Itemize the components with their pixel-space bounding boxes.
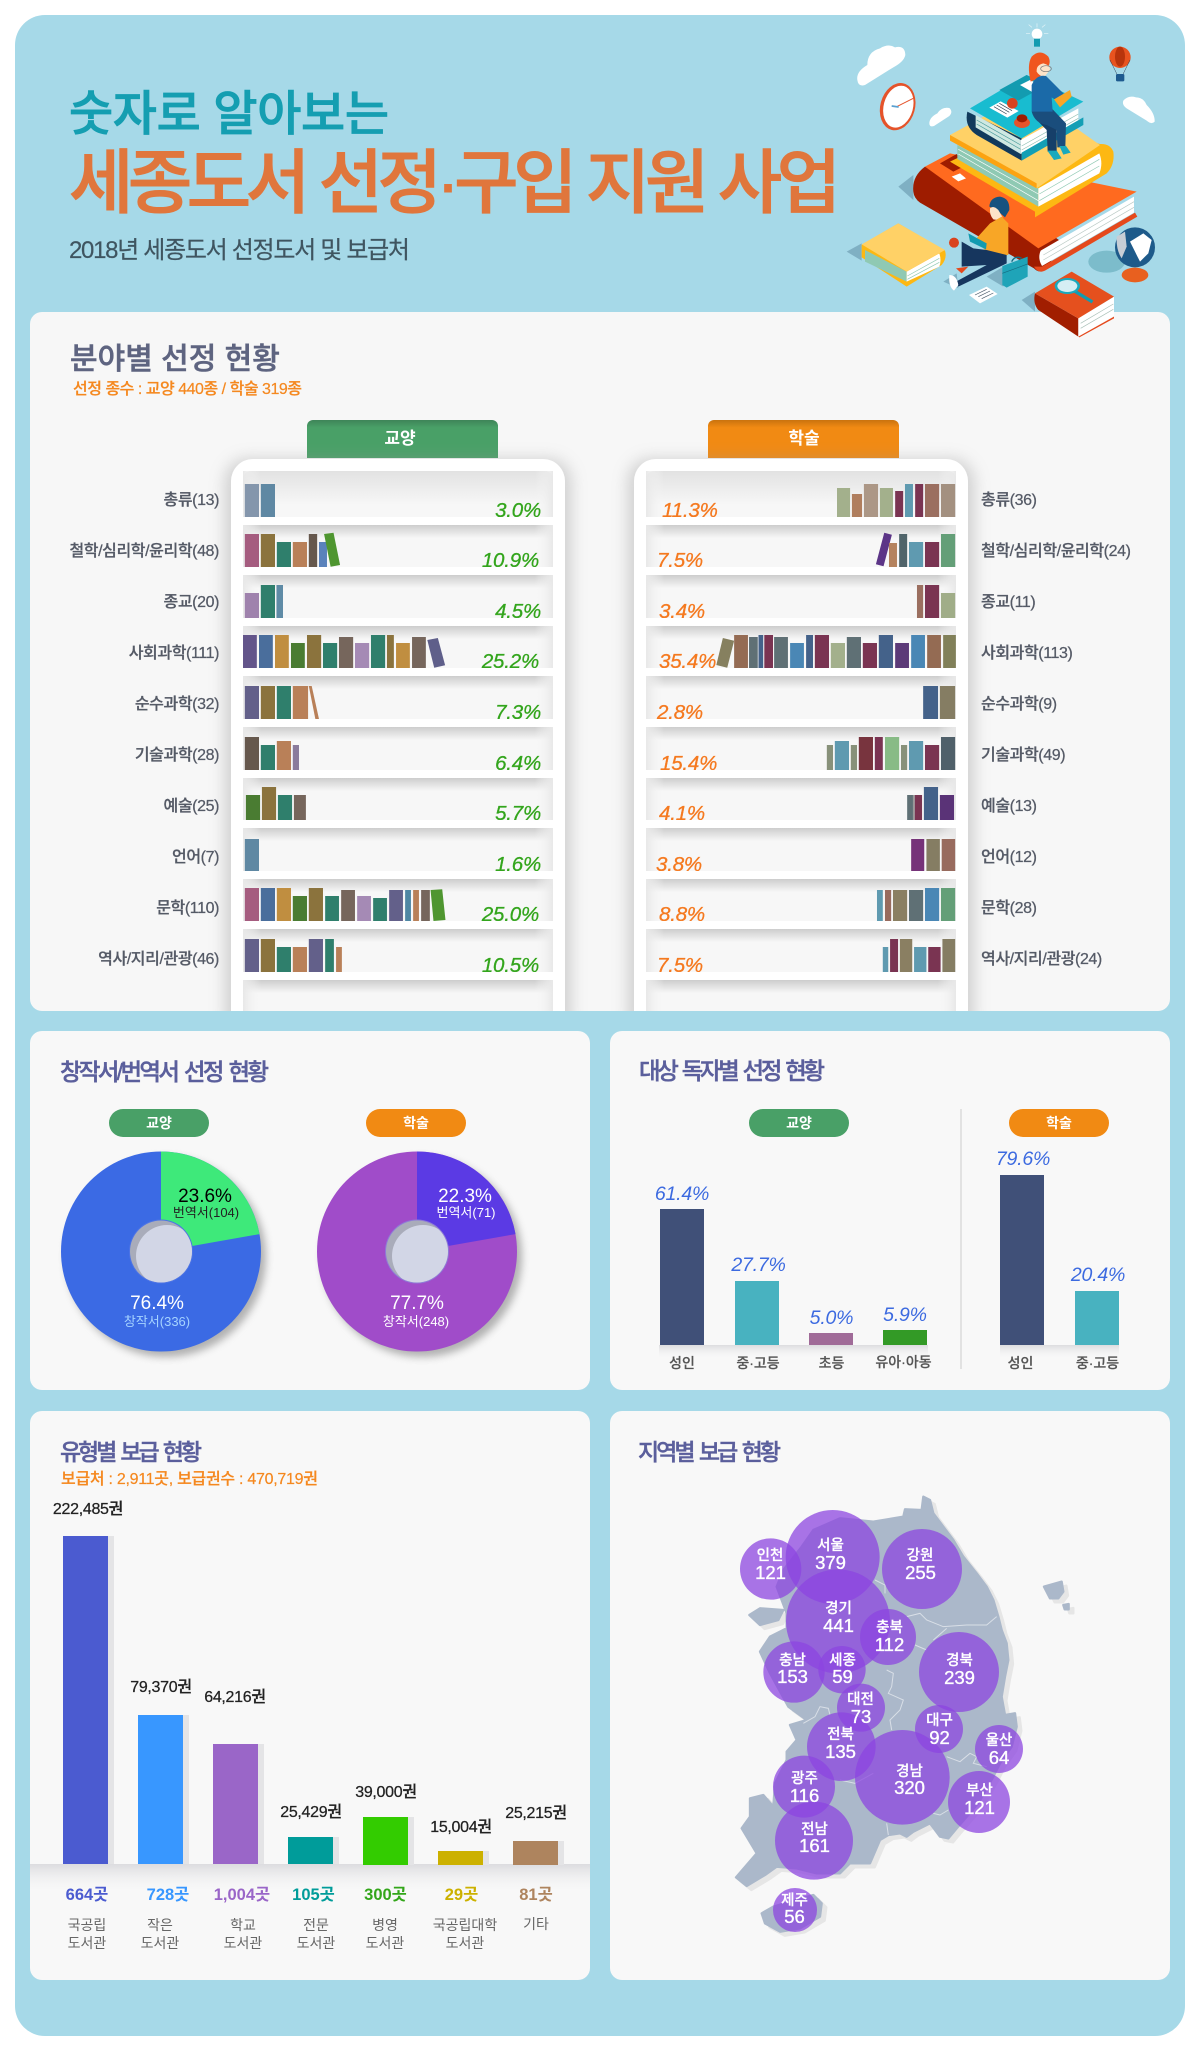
panel: field selection [30, 312, 1170, 1039]
category labels left: 총류(13) [164, 491, 219, 509]
category labels left: 철학/심리학/윤리학(48) [69, 542, 219, 560]
category labels right: 종교(11) [981, 594, 1035, 611]
region labels: 경기 [825, 1600, 852, 1617]
percentages: 교양: 25.2% [481, 650, 539, 673]
panel: distribution by region [610, 1411, 1170, 1980]
pie chart: 학술: 77.7% [390, 1293, 444, 1314]
location counts: 1,004곳 [214, 1886, 270, 1904]
category labels right: 기술과학(49) [981, 746, 1065, 764]
percentages: 교양: 10.9% [482, 549, 539, 572]
shelves: 교양 [243, 517, 553, 980]
percentages: 학술: 35.4% [659, 650, 716, 673]
category labels right: 예술(13) [981, 797, 1037, 815]
title line 2: 세종도서 선정·구입 지원 사업 [69, 144, 841, 222]
category labels right: 문학(28) [981, 899, 1037, 917]
bar chart: 학술: 중·고등 [1076, 1355, 1119, 1371]
bookshelf: 학술 [628, 459, 974, 1039]
bar values: 15,004권 [430, 1818, 492, 1836]
percentages: 교양: 7.3% [495, 701, 541, 724]
bar chart: 교양: 초등 [819, 1355, 844, 1371]
region labels: 239 [944, 1667, 975, 1688]
library type names: 병영 [372, 1917, 398, 1933]
region labels: 112 [875, 1634, 904, 1655]
bar values: 79,370권 [130, 1678, 192, 1696]
percentages: 교양: 1.6% [495, 853, 541, 876]
pie chart: 학술: 번역서(71) [436, 1205, 496, 1220]
pie chart: 학술 [317, 1152, 522, 1357]
library type names: 도서관 [68, 1935, 106, 1951]
category labels right: 사회과학(113) [981, 644, 1073, 662]
region labels: 121 [964, 1797, 995, 1818]
pill: 교양: 교양 [786, 1115, 812, 1131]
region labels: 320 [894, 1777, 925, 1798]
bar chart: 학술: 성인 [1008, 1355, 1033, 1371]
book: large yellow [950, 93, 1114, 217]
icon: paper [969, 287, 998, 303]
percentages: 교양 [481, 499, 541, 977]
bar chart: 교양: 성인 [669, 1355, 695, 1371]
library type names: 도서관 [297, 1935, 335, 1951]
region labels [755, 1537, 1012, 1927]
region labels: 부산 [966, 1782, 993, 1799]
heading: 창작서/번역서 선정 현황 [60, 1059, 269, 1085]
sub heading: 보급처 : 2,911곳, 보급권수 : 470,719권 [61, 1470, 318, 1488]
location counts [66, 1886, 553, 1904]
bar chart: library types [63, 1536, 564, 1865]
category labels left: 예술(25) [164, 797, 219, 815]
title block [69, 88, 841, 264]
category labels right [981, 491, 1131, 968]
shelves: 학술 [646, 517, 956, 980]
region labels: 92 [929, 1727, 950, 1748]
region labels: 379 [815, 1552, 846, 1573]
library type names: 전문 [303, 1917, 329, 1933]
percentages: 학술: 2.8% [656, 701, 703, 724]
bar chart: 학술: 79.6% [996, 1148, 1050, 1170]
location counts: 81곳 [519, 1886, 553, 1904]
pie chart: 교양: 번역서(104) [173, 1205, 239, 1220]
library type names [68, 1916, 549, 1951]
category labels right: 언어(12) [981, 848, 1037, 866]
percentages: 학술: 7.5% [657, 954, 703, 977]
bar values: 39,000권 [355, 1783, 417, 1801]
percentages: 교양: 3.0% [495, 499, 541, 522]
heading: 지역별 보급 현황 [638, 1439, 781, 1465]
region labels: 전남 [801, 1821, 828, 1838]
icon: hot-air balloon [1109, 47, 1131, 81]
bar chart: 교양: 중·고등 [736, 1355, 780, 1371]
pill: 교양 [749, 1109, 849, 1137]
category labels right: 역사/지리/관광(24) [981, 950, 1102, 968]
library type names: 도서관 [224, 1935, 262, 1951]
region labels: 56 [784, 1906, 805, 1927]
tab: 교양 [307, 420, 498, 458]
books: 학술 [716, 484, 956, 972]
tab: 학술 [708, 420, 899, 458]
bookshelf: 교양 [225, 459, 571, 1039]
percentages: 학술: 11.3% [662, 499, 718, 522]
region labels: 153 [777, 1666, 808, 1687]
bar chart: 교양: 27.7% [730, 1254, 786, 1276]
region labels: 울산 [986, 1732, 1012, 1749]
region labels: 161 [799, 1835, 830, 1856]
percentages: 학술: 8.8% [659, 903, 705, 926]
percentages: 학술: 4.1% [659, 802, 705, 825]
region labels: 충남 [779, 1652, 806, 1669]
region labels: 인천 [757, 1547, 783, 1564]
icon: clouds [857, 46, 1155, 126]
percentages: 학술: 3.8% [656, 853, 702, 876]
figure: man sitting [949, 197, 1009, 291]
tab: 학술: 학술 [788, 429, 820, 448]
pill: 학술 [366, 1109, 466, 1137]
region labels: 대전 [847, 1691, 874, 1708]
bar chart: 교양: 5.0% [810, 1307, 853, 1329]
panel: distribution by type [30, 1411, 590, 1980]
pill: 학술: 학술 [1046, 1115, 1072, 1131]
region labels: 경북 [946, 1652, 973, 1669]
category labels left: 문학(110) [156, 899, 219, 917]
category labels left: 사회과학(111) [129, 644, 219, 662]
pill: 교양: 교양 [146, 1115, 172, 1131]
region labels: 강원 [907, 1547, 933, 1564]
icon: light bulb [1026, 23, 1048, 47]
book: teal [967, 75, 1083, 161]
region labels: 서울 [817, 1537, 844, 1554]
category labels left: 종교(20) [164, 594, 219, 611]
library type names: 작은 [147, 1917, 173, 1933]
category labels left [69, 491, 219, 968]
region labels: 세종 [829, 1652, 856, 1669]
percentages: 교양: 6.4% [495, 752, 541, 775]
heading: 유형별 보급 현황 [60, 1439, 202, 1465]
library type names: 도서관 [446, 1935, 484, 1951]
pie chart: 교양: 창작서(336) [124, 1314, 190, 1329]
percentages: 교양: 10.5% [482, 954, 539, 977]
bar chart: 교양: 5.9% [883, 1304, 927, 1326]
category labels right: 철학/심리학/윤리학(24) [981, 542, 1131, 560]
illustration: books and readers [847, 23, 1155, 337]
icon: clock [875, 79, 921, 134]
library type names: 기타 [523, 1916, 549, 1932]
pill: 학술: 학술 [403, 1115, 429, 1131]
region labels: 73 [851, 1706, 871, 1727]
bar chart: 교양: 유아·아동 [875, 1354, 932, 1370]
library type names: 국공립 [68, 1917, 106, 1933]
pill: 학술 [1009, 1109, 1109, 1137]
heading: 분야별 선정 현황 [70, 343, 280, 376]
bar chart: 학술 [996, 1148, 1125, 1371]
library type names: 도서관 [141, 1935, 179, 1951]
bar chart: 교양 [655, 1183, 932, 1371]
percentages: 학술: 7.5% [657, 549, 703, 572]
location counts: 728곳 [147, 1886, 189, 1904]
region labels: 441 [823, 1615, 854, 1636]
region labels: 전북 [827, 1726, 854, 1743]
bar values: 25,429권 [280, 1803, 342, 1821]
region labels: 121 [755, 1562, 786, 1583]
pie chart: 학술: 22.3% [438, 1186, 492, 1207]
category labels left: 역사/지리/관광(46) [98, 950, 219, 968]
pie chart: 교양: 23.6% [178, 1186, 232, 1207]
bubbles [740, 1510, 1023, 1932]
heading: 대상 독자별 선정 현황 [639, 1058, 825, 1084]
icon: globe [1088, 227, 1155, 282]
pie chart: 교양 [61, 1152, 266, 1357]
tab: 교양: 교양 [384, 429, 416, 448]
category labels right: 총류(36) [981, 491, 1037, 509]
bar chart: 교양: 61.4% [655, 1183, 709, 1205]
books: 교양 [243, 484, 445, 972]
region labels: 충북 [876, 1619, 903, 1636]
library type names: 학교 [230, 1917, 256, 1933]
category labels left: 순수과학(32) [135, 695, 219, 713]
icon: briefcase [1002, 257, 1028, 288]
region labels: 135 [825, 1741, 856, 1762]
panel: original vs translated [30, 1031, 590, 1390]
category labels left: 기술과학(28) [135, 746, 219, 764]
percentages: 학술: 15.4% [660, 752, 717, 775]
percentages: 교양: 4.5% [495, 600, 541, 623]
pie chart: 학술: 창작서(248) [383, 1314, 449, 1329]
pill: 교양 [109, 1109, 209, 1137]
map: South Korea with regional bubbles [736, 1497, 1073, 1936]
region labels: 제주 [781, 1892, 808, 1909]
percentages: 학술 [656, 499, 718, 977]
region labels: 116 [790, 1785, 819, 1806]
sub heading: 선정 종수 : 교양 440종 / 학술 319종 [73, 380, 302, 398]
percentages: 교양: 25.0% [481, 903, 539, 926]
bar values [53, 1500, 567, 1836]
subtitle: 2018년 세종도서 선정도서 및 보급처 [69, 237, 410, 264]
figure: woman reading [1029, 52, 1072, 160]
region labels: 64 [989, 1747, 1009, 1768]
shadows [847, 175, 1035, 312]
bar values: 25,215권 [505, 1804, 567, 1822]
category labels right: 순수과학(9) [981, 695, 1057, 713]
percentages: 교양: 5.7% [495, 802, 541, 825]
bar values: 64,216권 [204, 1688, 266, 1706]
bar chart: 학술: 20.4% [1070, 1264, 1125, 1286]
bar values: 222,485권 [53, 1500, 123, 1518]
book: small yellow [862, 223, 946, 287]
book: red with magnifier [1034, 272, 1114, 337]
panel: target readers [610, 1031, 1170, 1390]
library type names: 도서관 [366, 1935, 404, 1951]
location counts: 105곳 [292, 1886, 335, 1904]
region labels: 경남 [896, 1763, 923, 1780]
region labels: 광주 [791, 1770, 818, 1787]
location counts: 300곳 [364, 1886, 407, 1904]
title line 1: 숫자로 알아보는 [69, 88, 389, 141]
location counts: 664곳 [66, 1886, 108, 1904]
library type names: 국공립대학 [433, 1917, 497, 1933]
pie chart: 교양: 76.4% [130, 1293, 184, 1314]
category labels left: 언어(7) [172, 848, 219, 866]
region labels: 59 [832, 1666, 853, 1687]
region labels: 255 [905, 1562, 936, 1583]
location counts: 29곳 [445, 1886, 478, 1904]
region labels: 대구 [926, 1712, 953, 1729]
percentages: 학술: 3.4% [659, 600, 705, 623]
book: large red [913, 153, 1137, 272]
